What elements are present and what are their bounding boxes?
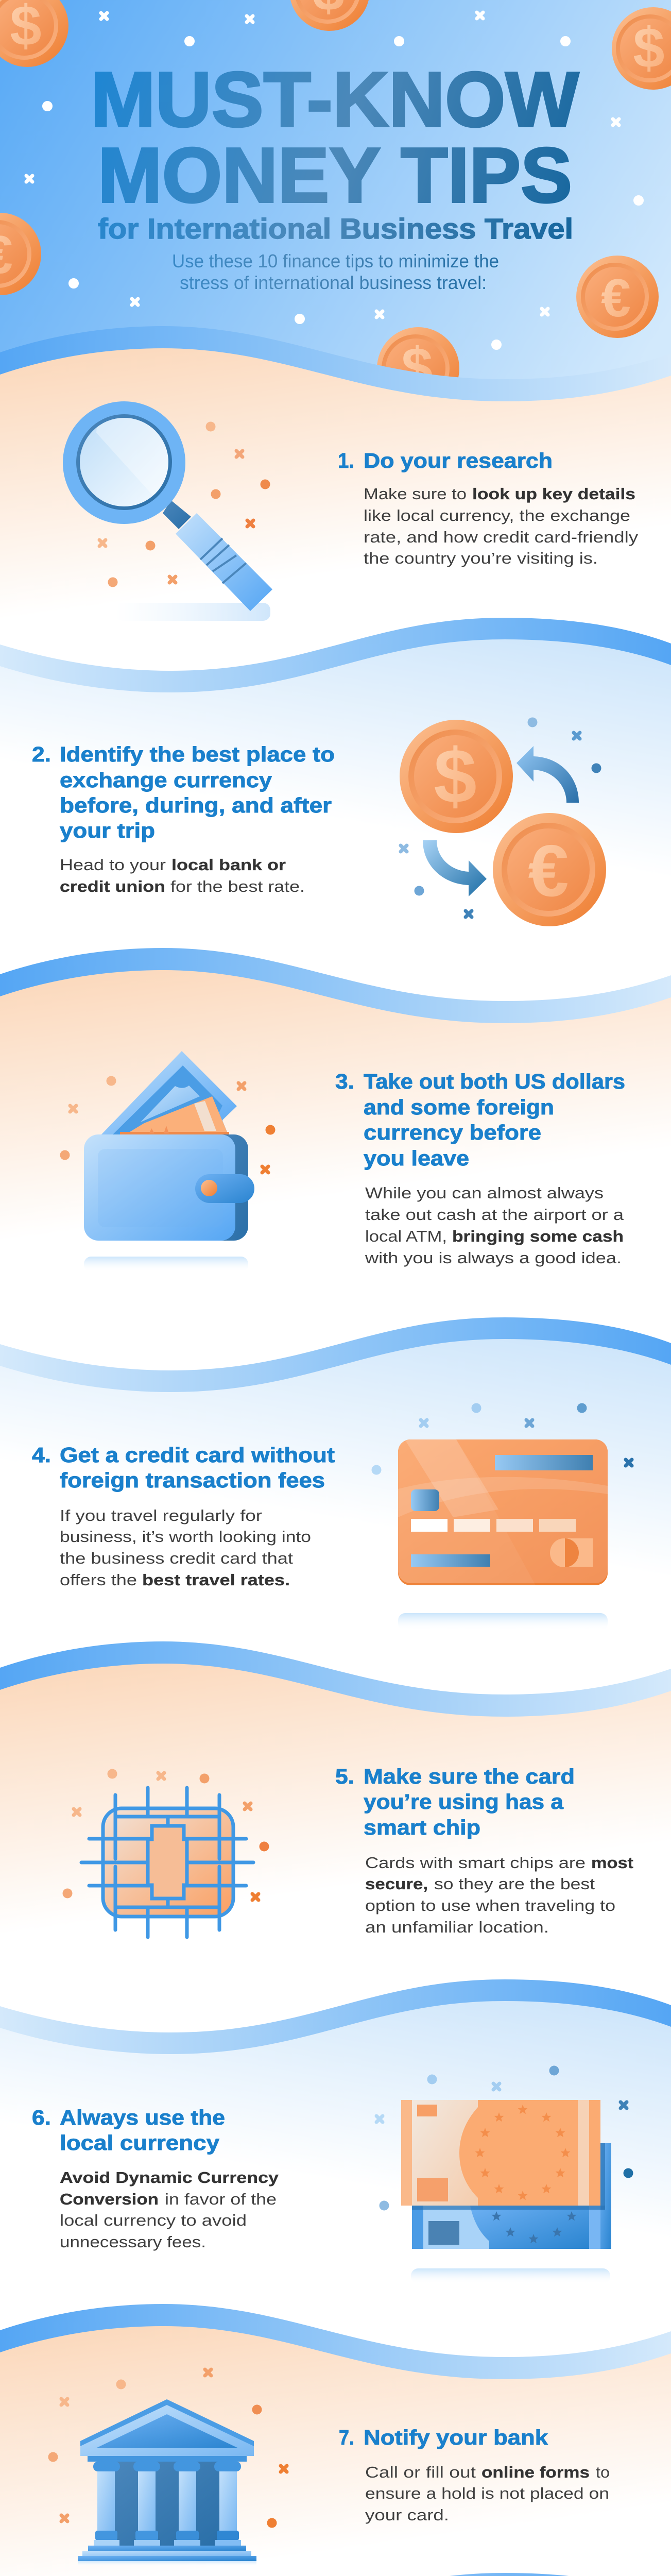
heading: tip 3: Take out both US dollars	[364, 1070, 625, 1093]
panel: tip 6 local currency	[0, 1979, 671, 2309]
subtitle: stress of international business travel:	[180, 272, 487, 293]
text: tip 2 body: Head to your	[60, 856, 166, 874]
heading: tip 2: exchange currency	[60, 768, 272, 792]
heading: tip 5: 5.	[335, 1765, 354, 1788]
heading: tip 4: Get a credit card without	[60, 1443, 335, 1467]
hero decoration: white dots and crosses	[26, 12, 644, 349]
heading: tip 1: 1.	[338, 449, 354, 472]
heading: tip 2: Identify the best place to	[60, 742, 335, 766]
text: tip 3 body: While you can almost always	[365, 1184, 604, 1202]
text: tip 5 body: Cards with smart chips are	[365, 1854, 586, 1872]
text: tip 4 body: the business credit card that	[60, 1549, 293, 1567]
panel: tip 2 exchange	[0, 618, 671, 947]
panel: tip 5 smart chip	[0, 1641, 671, 1971]
text: tip 7 body: your card.	[365, 2506, 449, 2524]
text: tip 5 body: secure,	[365, 1875, 428, 1893]
panel: tip 8 pay bills	[0, 2573, 671, 2576]
icon: dollar coin bottom: $	[401, 336, 433, 400]
heading: tip 3: you leave	[364, 1146, 469, 1170]
heading: tip 5: Make sure the card	[364, 1765, 575, 1788]
decoration: orange dots and crosses	[99, 421, 270, 587]
heading: tip 3: and some foreign	[364, 1095, 554, 1119]
decoration: orange dots and crosses	[63, 1769, 269, 1900]
icon: euro coin right	[576, 256, 659, 338]
heading: tip 6: 6.	[32, 2106, 51, 2129]
panel: tip 3 cash	[0, 948, 671, 1278]
text: tip 2 body: for the best rate.	[170, 877, 305, 895]
text: tip 5 body: an unfamiliar location.	[365, 1918, 549, 1936]
text: tip 6 body: in favor of the	[165, 2190, 277, 2208]
icon: coin top center	[289, 0, 370, 31]
heading: tip 2	[32, 742, 335, 842]
icon: euro bills	[401, 2100, 611, 2284]
text: tip 4 body: business, it’s worth looking into	[60, 1528, 311, 1546]
heading: tip 5: smart chip	[364, 1816, 480, 1839]
heading: tip 7: 7.	[339, 2426, 354, 2449]
icon: wallet with bills	[84, 1051, 254, 1272]
heading: tip 2: 2.	[32, 742, 51, 766]
text: tip 1 body: like local currency, the exchange	[364, 506, 630, 524]
heading: tip 3: currency before	[364, 1121, 541, 1144]
icon: bank building	[78, 2399, 256, 2566]
title	[91, 56, 579, 245]
text: tip 5 body: option to use when traveling to	[365, 1896, 615, 1914]
decoration: blue dots and crosses	[372, 1403, 632, 1475]
decoration: orange dots and crosses	[48, 2369, 287, 2528]
text: tip 2 body	[60, 856, 305, 895]
heading: tip 1: Do your research	[364, 449, 553, 472]
icon: coin top right: $	[633, 16, 665, 80]
text: tip 2 body: local bank or	[171, 856, 286, 874]
icon: euro coin left	[0, 213, 41, 295]
text: tip 6 body: Conversion	[60, 2190, 159, 2208]
heading: tip 3: 3.	[335, 1070, 354, 1093]
title: MONEY TIPS	[98, 131, 572, 218]
heading: tip 5: you’re using has a	[364, 1790, 564, 1814]
text: tip 7 body	[365, 2463, 610, 2524]
text: tip 1 body: Make sure to	[364, 485, 467, 503]
icon: dollar coin bottom	[377, 327, 459, 410]
icon: coin top left	[0, 0, 68, 67]
text: tip 4 body: offers the	[60, 1571, 137, 1589]
panel: tip 4 credit card	[0, 1317, 671, 1647]
text: tip 6 body: local currency to avoid	[60, 2211, 247, 2229]
text: tip 2 body: credit union	[60, 877, 165, 895]
text: tip 6 body: Avoid Dynamic Currency	[60, 2168, 279, 2187]
heading: tip 6: Always use the	[60, 2106, 225, 2129]
decoration: blue dots and crosses	[401, 717, 601, 917]
subtitle	[172, 250, 499, 293]
text: tip 7 body: Call or fill out	[365, 2463, 476, 2481]
icon: coins with exchange arrows: €	[528, 830, 569, 912]
text: tip 4 body	[60, 1506, 311, 1589]
text: tip 1 body: the country you’re visiting is.	[364, 549, 598, 567]
text: tip 3 body: take out cash at the airport or a	[365, 1206, 624, 1224]
icon: credit card	[398, 1439, 608, 1631]
decoration: orange dots and crosses	[60, 1076, 275, 1173]
heading: tip 2: your trip	[60, 819, 155, 842]
heading: tip 6	[32, 2106, 225, 2155]
title: for International Business Travel	[98, 212, 573, 245]
heading: tip 3	[335, 1070, 625, 1170]
text: tip 5 body: so they are the best	[434, 1875, 595, 1893]
heading: tip 5	[335, 1765, 575, 1839]
text: tip 5 body	[365, 1854, 633, 1936]
text: tip 5 body: most	[591, 1854, 633, 1872]
heading: tip 7: Notify your bank	[364, 2426, 548, 2449]
text: tip 4 body: best travel rates.	[142, 1571, 290, 1589]
decoration: blue dots and crosses	[376, 2066, 633, 2210]
text: tip 7 body: ensure a hold is not placed on	[365, 2484, 609, 2502]
icon: coins with exchange arrows: $	[434, 733, 477, 819]
subtitle: Use these 10 finance tips to minimize the	[172, 250, 499, 272]
text: tip 6 body	[60, 2168, 279, 2251]
text: tip 3 body: bringing some cash	[452, 1227, 624, 1245]
icon: coin top right	[612, 7, 671, 90]
heading: tip 6: local currency	[60, 2131, 219, 2155]
text: tip 7 body: to	[596, 2463, 610, 2481]
text: tip 3 body: with you is always a good idea.	[365, 1249, 622, 1267]
text: tip 4 body: If you travel regularly for	[60, 1506, 262, 1524]
icon: smart chip	[81, 1788, 253, 1937]
text: tip 3 body: local ATM,	[365, 1227, 447, 1245]
icon: coins with exchange arrows	[400, 720, 606, 926]
heading: tip 4	[32, 1443, 335, 1492]
title: MUST-KNOW	[91, 56, 579, 143]
text: tip 3 body	[365, 1184, 624, 1267]
text: tip 6 body: unnecessary fees.	[60, 2233, 206, 2251]
panel: tip 7 notify bank	[0, 2304, 671, 2576]
heading: tip 2: before, during, and after	[60, 793, 332, 817]
heading: tip 4: foreign transaction fees	[60, 1468, 325, 1492]
panel: tip 1 research	[0, 326, 671, 621]
text: tip 7 body: online forms	[481, 2463, 590, 2481]
text: tip 1 body: look up key details	[472, 485, 635, 503]
panel: hero background	[0, 0, 671, 412]
icon: euro coin right: €	[601, 268, 631, 328]
heading: tip 4: 4.	[32, 1443, 51, 1467]
icon: magnifying glass	[63, 401, 272, 621]
text: tip 1 body: rate, and how credit card-friendly	[364, 528, 639, 546]
text: tip 1 body	[364, 485, 639, 567]
